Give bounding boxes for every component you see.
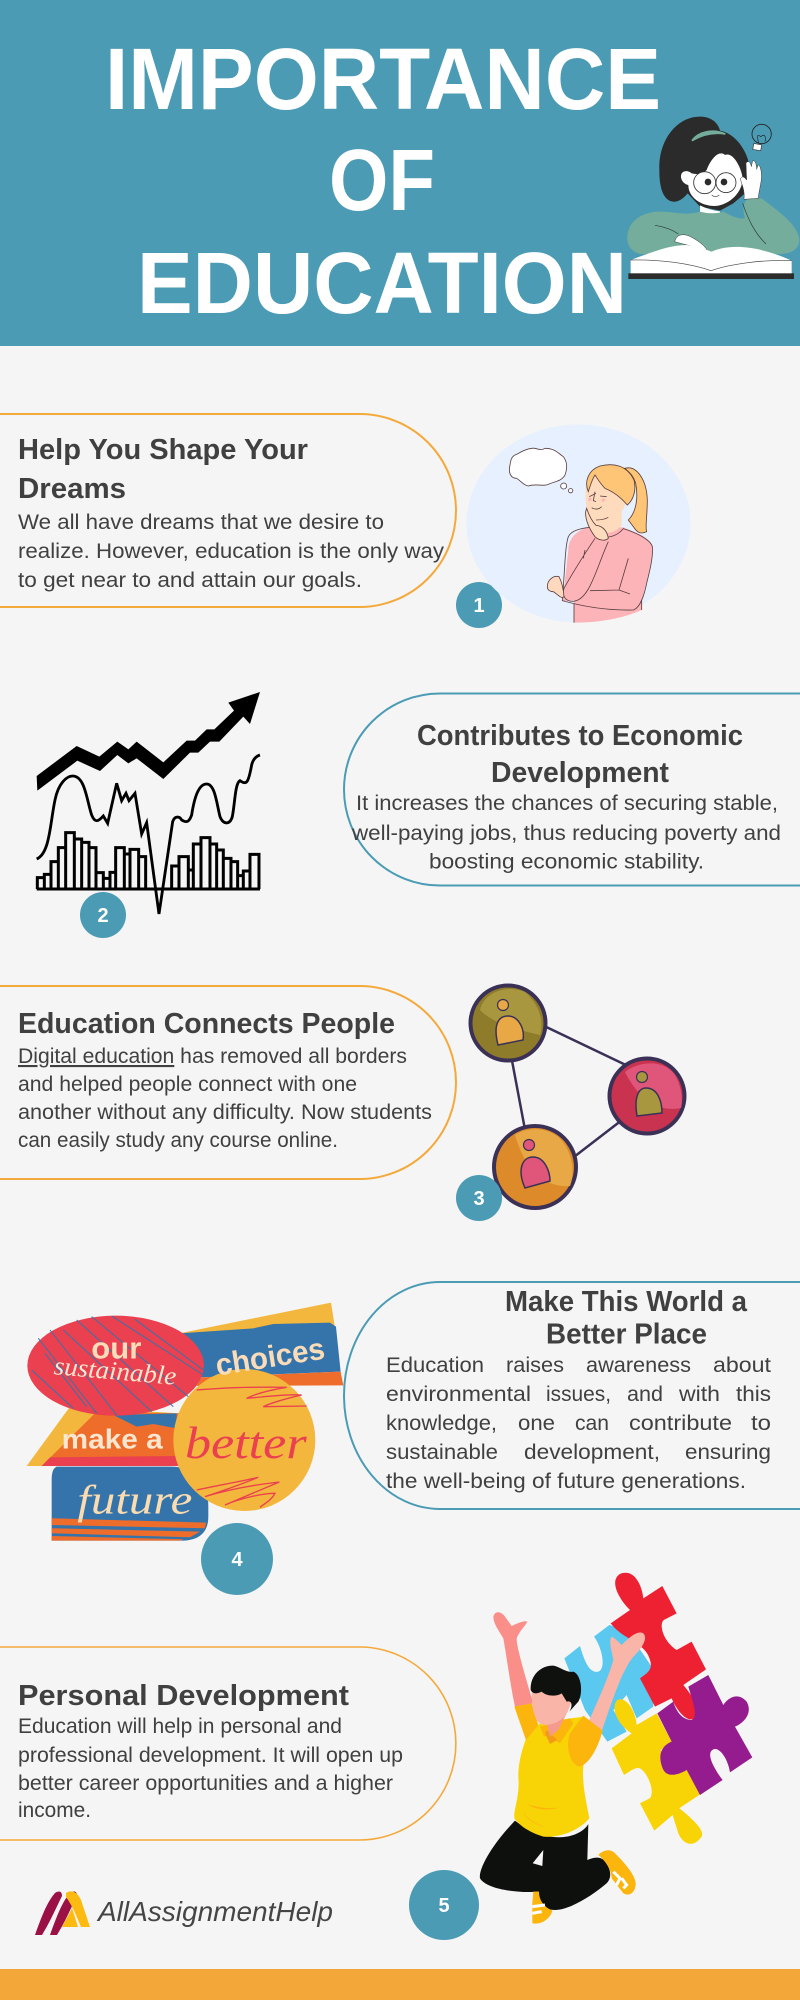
body text: Education will help in personal and xyxy=(18,1715,342,1738)
body text: can easily study any course online. xyxy=(18,1129,338,1152)
title: IMPORTANCE xyxy=(105,31,661,128)
body text: and helped people connect with one xyxy=(18,1073,357,1096)
pill outline orange xyxy=(0,414,456,607)
body text xyxy=(18,1045,432,1152)
node: orange xyxy=(494,1126,576,1208)
number badge 4: 4 xyxy=(231,1549,243,1571)
node: crimson xyxy=(610,1058,684,1134)
body text justified: knowledge, xyxy=(386,1412,497,1435)
number badge 2: 2 xyxy=(97,905,109,927)
node: olive xyxy=(470,986,546,1060)
pill outline blue xyxy=(344,1282,800,1509)
body text justified: raises xyxy=(506,1354,564,1377)
number badge 4 xyxy=(201,1523,273,1595)
heading: Contributes to Economic xyxy=(417,720,743,752)
heading: Development xyxy=(491,757,669,789)
heading: Personal Development xyxy=(18,1680,349,1712)
number badge 5: 5 xyxy=(438,1895,450,1917)
footer bar xyxy=(0,1969,800,2000)
body text justified: and xyxy=(627,1383,663,1406)
man xyxy=(480,1612,645,1924)
body text justified: to xyxy=(751,1412,771,1435)
icon: girl reading a book with light bulb xyxy=(627,117,799,279)
body text justified: about xyxy=(713,1354,771,1377)
panel: education connects people xyxy=(0,986,684,1221)
body text: boosting economic stability. xyxy=(429,850,704,874)
heading xyxy=(505,1286,748,1350)
puzzle: purple xyxy=(657,1675,752,1795)
header banner xyxy=(0,0,800,346)
panel: help you shape your dreams xyxy=(0,414,690,628)
pill outline orange xyxy=(0,1647,456,1840)
illustration: our sustainable choices make a better future: better xyxy=(185,1418,307,1468)
body text: We all have dreams that we desire to xyxy=(18,511,384,534)
body text: income. xyxy=(18,1799,91,1822)
title: EDUCATION xyxy=(137,235,627,332)
heading xyxy=(417,720,743,789)
body text: well-paying jobs, thus reducing poverty and xyxy=(351,822,781,845)
illustration: woman thinking xyxy=(466,424,690,623)
body text justified: ensuring xyxy=(685,1441,771,1464)
title: OF xyxy=(329,132,435,229)
body text xyxy=(18,511,445,592)
body text justified: development, xyxy=(524,1441,660,1464)
body text: better career opportunities and a higher xyxy=(18,1772,393,1795)
panel: make this world a better place xyxy=(27,1282,800,1595)
number badge 1 circle xyxy=(456,582,502,628)
puzzle: blue xyxy=(564,1625,653,1742)
heading xyxy=(18,434,308,505)
body text justified: awareness xyxy=(586,1354,691,1377)
number badge 5 xyxy=(409,1870,479,1940)
illustration: our sustainable choices make a better future: future xyxy=(77,1477,192,1523)
body text xyxy=(351,792,781,874)
body text justified: contribute xyxy=(629,1412,732,1435)
body text justified: can xyxy=(575,1412,609,1435)
puzzle: yellow xyxy=(612,1699,702,1844)
body text: Digital education has removed all borders xyxy=(18,1045,407,1068)
network of three people xyxy=(470,986,684,1208)
body text: professional development. It will open up xyxy=(18,1744,403,1767)
body text: realize. However, education is the only way xyxy=(18,540,445,563)
body text justified xyxy=(386,1354,771,1493)
heading: Make This World a xyxy=(505,1286,748,1318)
number badge 3: 3 xyxy=(473,1188,485,1210)
pill outline orange xyxy=(0,986,456,1179)
body text justified: one xyxy=(518,1412,555,1435)
number 1: 1 xyxy=(473,595,485,617)
brand name: AllAssignmentHelp xyxy=(96,1896,333,1927)
body text justified: with xyxy=(678,1383,720,1406)
heading: Better Place xyxy=(546,1318,707,1350)
illustration: our sustainable choices make a better future xyxy=(27,1303,343,1541)
heading: Education Connects People xyxy=(18,1008,395,1040)
chart: rising arrow, line and bars xyxy=(37,692,260,914)
illustration: our sustainable choices make a better future: our xyxy=(91,1332,141,1366)
body text: to get near to and attain our goals. xyxy=(18,569,362,592)
heading: Help You Shape Your xyxy=(18,434,308,466)
body text justified: environmental xyxy=(386,1383,531,1406)
illustration: our sustainable choices make a better future: sustainable xyxy=(53,1351,178,1391)
body text justified: the well-being of future generations. xyxy=(386,1470,746,1493)
panel: contributes to economic development xyxy=(37,692,800,938)
illustration: man jumping with puzzle pieces xyxy=(480,1573,752,1924)
body text justified: Education xyxy=(386,1354,484,1377)
body text justified: sustainable xyxy=(386,1441,498,1464)
logo: AllAssignmentHelp xyxy=(35,1891,333,1935)
illustration: our sustainable choices make a better future: choices xyxy=(213,1332,327,1383)
logo mark xyxy=(35,1891,90,1935)
number badge 3 xyxy=(456,1175,502,1221)
pill outline blue xyxy=(344,694,800,886)
number badge 2 xyxy=(80,892,126,938)
body text: another without any difficulty. Now students xyxy=(18,1101,432,1124)
body text xyxy=(18,1715,403,1822)
puzzle: red xyxy=(611,1573,706,1719)
title xyxy=(105,31,661,332)
body text: It increases the chances of securing stable, xyxy=(356,792,778,815)
body text justified: issues, xyxy=(546,1383,611,1406)
heading: Dreams xyxy=(18,473,126,505)
illustration: our sustainable choices make a better future: make a xyxy=(62,1424,164,1455)
body text justified: this xyxy=(736,1383,771,1406)
panel: personal development xyxy=(0,1573,752,1940)
